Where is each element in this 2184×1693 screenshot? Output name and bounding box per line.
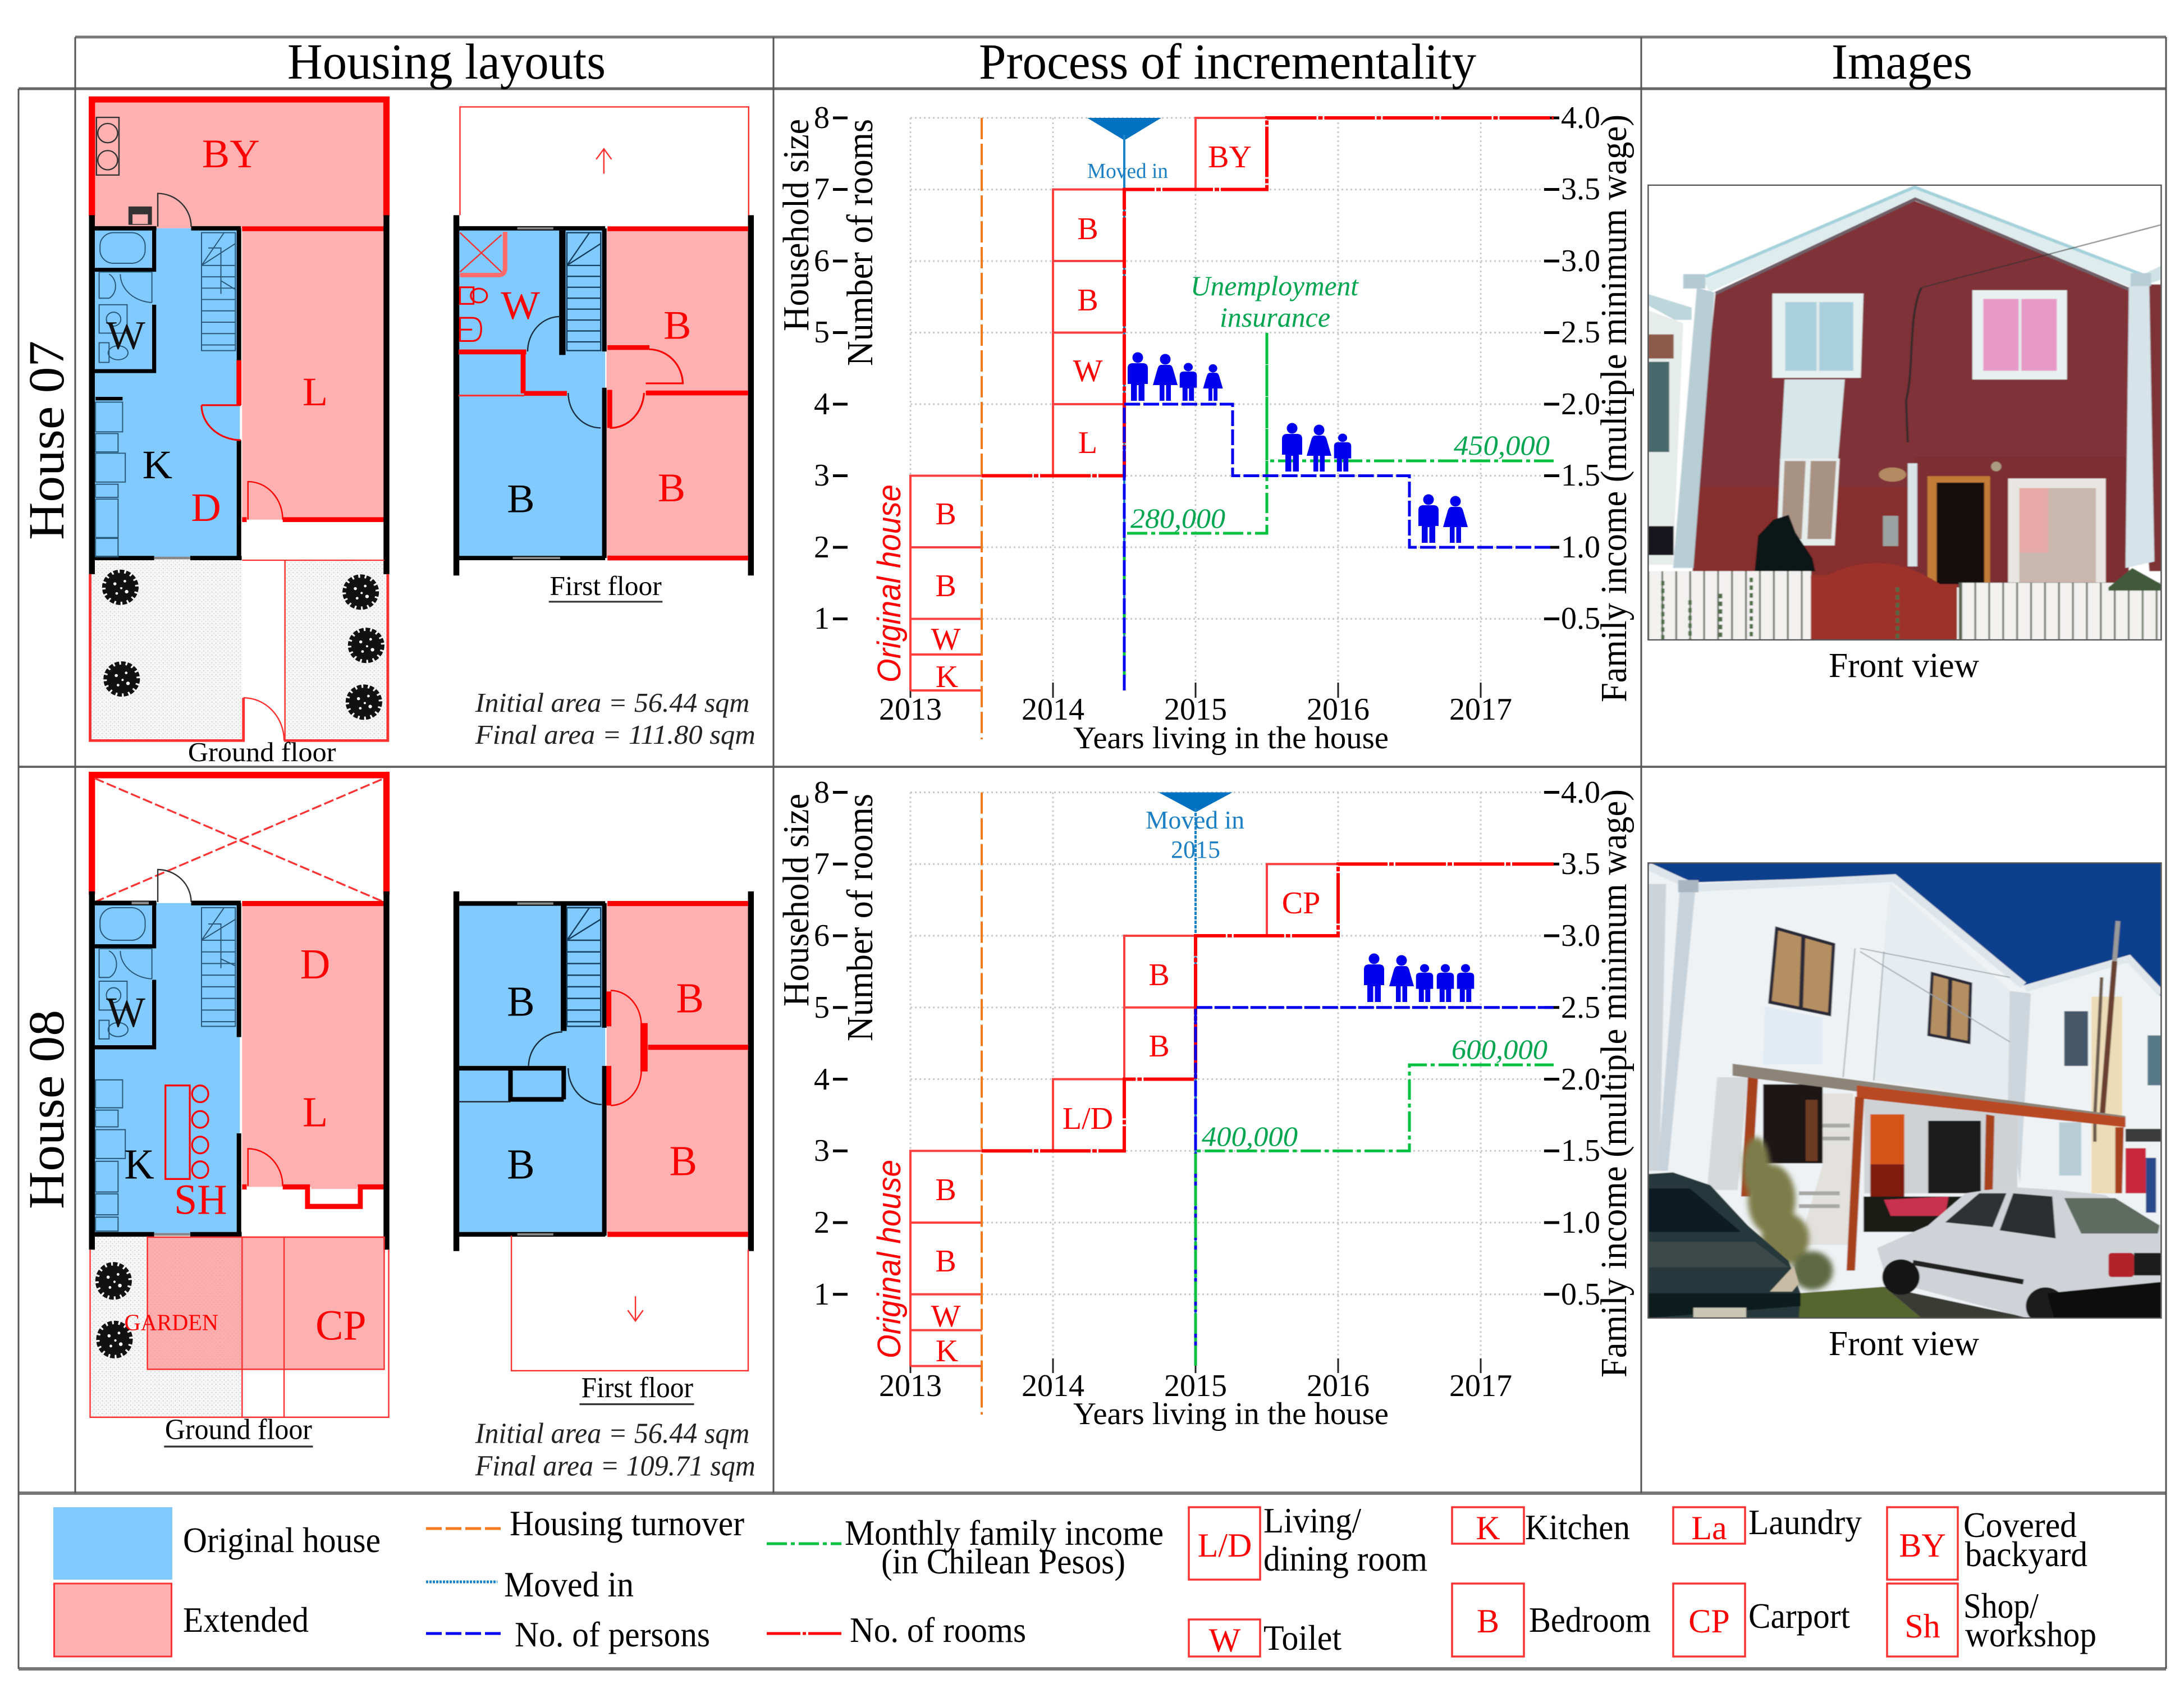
legend: shop/workshop (1887, 1584, 2096, 1657)
legend: shop/workshop: Sh (1904, 1608, 1940, 1645)
panel: House 08 floor plans (90, 775, 756, 1482)
left axis values: 4 (814, 387, 830, 422)
left axis values: 5 (814, 990, 830, 1025)
room labels: first floor (501, 283, 691, 521)
legend: toilet: Toilet (1263, 1618, 1341, 1658)
right axis values: 4.0 (1561, 100, 1600, 135)
room box letters: L (1078, 425, 1097, 460)
right axis values (1561, 775, 1600, 1312)
right axis values: 0.5 (1561, 601, 1600, 636)
year axis: 2015 (1164, 692, 1227, 727)
right axis values: 2.5 (1561, 315, 1600, 350)
room labels: ground floor: D (191, 485, 221, 530)
moved in marker: 2015 (1171, 836, 1220, 863)
right axis values: 2.0 (1561, 387, 1600, 422)
legend: laundry: La (1691, 1509, 1727, 1546)
original house label: Original house (871, 484, 908, 683)
ground floor caption: Ground floor (188, 737, 336, 767)
room box letters: B (935, 1244, 956, 1279)
legend: covered backyard: Covered (1963, 1505, 2077, 1545)
number of rooms line (982, 118, 1554, 476)
room labels: ground floor: GARDEN (125, 1310, 218, 1335)
legend: bedroom (1452, 1584, 1651, 1657)
legend: toilet (1189, 1618, 1341, 1659)
area note (475, 1417, 756, 1482)
legend: extended swatch: Extended (183, 1600, 309, 1640)
room box letters: W (931, 1299, 961, 1334)
left axis values: 5 (814, 315, 830, 350)
left axis values: 1 (814, 1277, 830, 1312)
room labels: ground floor (106, 131, 328, 530)
first floor plan (456, 891, 751, 1371)
row label: House 07: House 07 (19, 341, 75, 540)
photo: House 07 front view (1648, 185, 2161, 640)
legend: shop/workshop: workshop (1965, 1614, 2096, 1654)
year axis: 2017 (1449, 1369, 1512, 1403)
room labels: first floor: B (676, 974, 704, 1022)
legend: carport (1673, 1584, 1850, 1657)
year axis: 2015 (1164, 1369, 1227, 1403)
legend: extended swatch (54, 1584, 309, 1657)
year axis: 2014 (1022, 1369, 1084, 1403)
right axis values: 0.5 (1561, 1277, 1600, 1312)
first floor caption: First floor (550, 571, 662, 601)
housing turnover line (981, 793, 983, 1415)
room boxes (910, 118, 1267, 690)
number of rooms line (982, 864, 1554, 1151)
right axis values: 2.5 (1561, 990, 1600, 1025)
income values: 600,000 (1452, 1033, 1547, 1065)
room labels: first floor: B (658, 465, 685, 510)
right axis values: 1.0 (1561, 1205, 1600, 1240)
legend: L/D: Living/ (1263, 1500, 1361, 1540)
room box letters: BY (1208, 140, 1252, 175)
year axis: 2017 (1449, 692, 1512, 727)
room labels: first floor: W (501, 283, 540, 328)
right axis values: 4.0 (1561, 775, 1600, 810)
left axis values: 6 (814, 244, 830, 278)
chart: House 07 process of incrementality (776, 100, 1634, 756)
room labels: ground floor: W (106, 989, 145, 1036)
room labels: ground floor: L (303, 1089, 328, 1136)
room box letters: B (1148, 1029, 1170, 1064)
legend: covered backyard: backyard (1965, 1534, 2087, 1574)
right axis values: 3.5 (1561, 172, 1600, 207)
income values (1130, 270, 1550, 534)
legend: original house swatch (53, 1507, 381, 1580)
y axis title: family income: Family income (multiple minimum wage) (1594, 115, 1634, 702)
year axis (879, 1369, 1512, 1403)
area note: Final area = 111.80 sqm (475, 719, 756, 750)
left axis values (814, 775, 830, 1312)
room box letters (931, 886, 1320, 1369)
year axis: 2013 (879, 1369, 942, 1403)
year axis: 2014 (1022, 692, 1084, 727)
room labels: ground floor: SH (174, 1176, 227, 1224)
y axis title: household size: Household size (776, 794, 817, 1006)
room labels: first floor: B (507, 1141, 535, 1188)
ground floor plan (90, 775, 389, 1417)
ground floor plan (90, 99, 388, 740)
left axis values: 1 (814, 601, 830, 636)
year axis: 2013 (879, 692, 942, 727)
heading: Images: Images (1832, 34, 1972, 90)
room labels: ground floor: K (124, 1141, 154, 1188)
x axis title: Years living in the house (1073, 721, 1389, 756)
icon: household of four (1128, 353, 1223, 401)
area note: Initial area = 56.44 sqm (475, 688, 749, 718)
room labels: ground floor: K (143, 442, 172, 487)
left axis values: 8 (814, 100, 830, 135)
income values: 400,000 (1202, 1120, 1298, 1152)
x axis title: Years living in the house (1073, 1397, 1389, 1431)
legend: kitchen (1452, 1507, 1630, 1547)
photo caption: Front view (1829, 647, 1979, 685)
icon: household of two (1418, 494, 1468, 543)
room box letters: W (1073, 354, 1103, 388)
y axis title: household size: Household size (776, 119, 817, 331)
family income line (1196, 1065, 1554, 1366)
legend: L/D: dining room (1263, 1539, 1427, 1578)
housing turnover line (981, 118, 983, 739)
legend: number of persons: No. of persons (515, 1614, 710, 1654)
icon: household of three (1282, 423, 1351, 472)
room box letters: B (935, 1173, 956, 1207)
legend: monthly family income: Monthly family income (845, 1513, 1164, 1553)
photo: House 08 front view (1648, 863, 2161, 1325)
room box letters: B (935, 569, 956, 603)
left axis values (814, 100, 830, 636)
left axis values: 3 (814, 458, 830, 493)
right axis values: 3.0 (1561, 244, 1600, 278)
room boxes (910, 864, 1338, 1366)
year axis (879, 692, 1512, 727)
room box letters (931, 140, 1252, 694)
legend: moved in: Moved in (504, 1564, 634, 1604)
income values: insurance (1220, 301, 1330, 333)
room labels: ground floor: W (106, 313, 145, 358)
left axis values: 4 (814, 1062, 830, 1097)
chart: House 08 process of incrementality (776, 775, 1634, 1431)
room labels: ground floor (106, 941, 367, 1349)
legend: monthly family income (767, 1513, 1164, 1581)
first floor caption: First floor (582, 1371, 693, 1403)
left axis values: 7 (814, 846, 830, 881)
legend: carport: Carport (1748, 1596, 1850, 1636)
right axis values: 3.5 (1561, 846, 1600, 881)
heading: Housing layouts: Housing layouts (287, 34, 606, 90)
ground floor caption: Ground floor (165, 1413, 312, 1445)
left axis values: 2 (814, 530, 830, 565)
legend: L/D: L/D (1198, 1527, 1252, 1564)
area note: Final area = 109.71 sqm (475, 1450, 756, 1482)
right axis values: 3.0 (1561, 918, 1600, 953)
moved in marker: Moved in (1087, 159, 1168, 183)
legend: original house swatch: Original house (183, 1520, 381, 1560)
legend: toilet: W (1209, 1622, 1241, 1659)
left axis values: 3 (814, 1133, 830, 1168)
right axis values: 1.5 (1561, 458, 1600, 493)
legend: laundry: Laundry (1748, 1502, 1862, 1542)
year axis: 2016 (1307, 1369, 1370, 1403)
y axis title: number of rooms: Number of rooms (840, 794, 881, 1041)
income values: 280,000 (1130, 502, 1225, 534)
moved in marker (1146, 793, 1244, 1366)
legend (53, 1500, 2096, 1659)
legend: housing turnover: Housing turnover (510, 1503, 744, 1543)
legend: kitchen: Kitchen (1525, 1507, 1630, 1547)
photo caption: Front view (1829, 1325, 1979, 1363)
room box letters: K (936, 1334, 958, 1369)
legend: carport: CP (1688, 1603, 1730, 1640)
legend: shop/workshop: Shop/ (1963, 1586, 2039, 1626)
room box letters: B (1148, 958, 1170, 992)
left axis values: 7 (814, 172, 830, 207)
legend: bedroom: Bedroom (1529, 1600, 1651, 1640)
original house label: Original house (871, 1160, 908, 1358)
legend: laundry (1673, 1502, 1862, 1546)
room labels: ground floor: L (303, 369, 328, 414)
room box letters: CP (1282, 886, 1320, 921)
y axis title: family income: Family income (multiple minimum wage) (1594, 789, 1634, 1378)
area note: Initial area = 56.44 sqm (475, 1417, 749, 1449)
legend: kitchen: K (1476, 1509, 1500, 1546)
legend: bedroom: B (1477, 1603, 1499, 1640)
moved in marker: Moved in (1146, 806, 1244, 834)
left axis values: 2 (814, 1205, 830, 1240)
right axis values: 2.0 (1561, 1062, 1600, 1097)
income values (1202, 1033, 1547, 1152)
room labels: ground floor: D (300, 941, 330, 988)
room labels: first floor: B (663, 303, 691, 347)
legend: number of rooms: No. of rooms (850, 1610, 1026, 1650)
number of persons line (1124, 404, 1554, 690)
legend: monthly family income: (in Chilean Pesos) (881, 1541, 1125, 1581)
icon: household of five (1364, 953, 1474, 1002)
room box letters: B (1077, 283, 1098, 318)
heading: Process of incrementality: Process of incrementality (979, 34, 1476, 90)
left axis values: 8 (814, 775, 830, 810)
panel: House 07 floor plans (90, 99, 756, 767)
right axis values: 1.0 (1561, 530, 1600, 565)
income values: 450,000 (1454, 429, 1550, 461)
left axis values: 6 (814, 918, 830, 953)
room labels: first floor: B (507, 477, 535, 521)
room labels: first floor: B (507, 978, 535, 1026)
right axis values: 1.5 (1561, 1133, 1600, 1168)
right axis values (1561, 100, 1600, 636)
y axis title: number of rooms: Number of rooms (840, 119, 881, 366)
area note (475, 688, 756, 750)
room labels: first floor: B (670, 1138, 697, 1185)
room box letters: B (935, 497, 956, 532)
legend: L/D (1189, 1500, 1427, 1580)
income values: Unemployment (1191, 270, 1359, 301)
legend: covered backyard (1887, 1505, 2087, 1580)
year axis: 2016 (1307, 692, 1370, 727)
family income line (1124, 332, 1554, 690)
room box letters: K (936, 660, 958, 694)
room box letters: W (931, 622, 961, 657)
room labels: first floor (507, 974, 704, 1188)
room box letters: L/D (1063, 1101, 1113, 1136)
row label: House 08: House 08 (19, 1010, 75, 1209)
first floor plan (456, 107, 751, 575)
number of persons line (1196, 1008, 1554, 1366)
room labels: ground floor: BY (202, 131, 260, 176)
legend: covered backyard: BY (1899, 1527, 1946, 1564)
room labels: ground floor: CP (315, 1302, 367, 1349)
moved in marker (1087, 118, 1168, 690)
room box letters: B (1077, 212, 1098, 246)
